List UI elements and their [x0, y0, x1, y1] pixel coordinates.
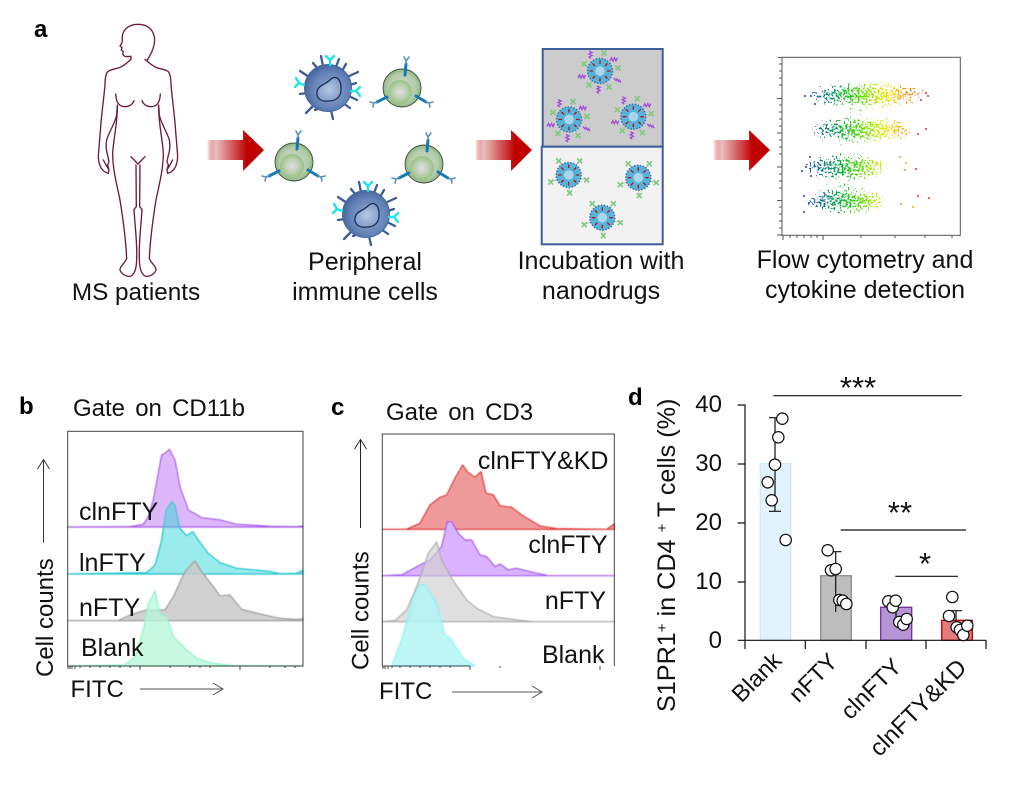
- label: MS patients: MS patients: [72, 279, 200, 306]
- chart: flow cytometry scatter: [777, 57, 960, 240]
- axes: [738, 405, 986, 649]
- error bars: [769, 418, 962, 625]
- data points: [762, 413, 973, 641]
- bars: [760, 464, 972, 640]
- panel b: histogram CD11b: [19, 393, 303, 703]
- label: peripheral immune cells: Peripheral: [308, 248, 422, 276]
- panel: nanodrug incubation bottom: [542, 147, 663, 244]
- frame and axes c: [382, 434, 614, 670]
- frame and axes b: [68, 431, 303, 670]
- panel c label: c: [331, 394, 344, 421]
- x tick labels: [727, 647, 972, 762]
- label: flow cytometry and cytokine detection: cytokine detection: [765, 276, 965, 304]
- labels c: clnFTY&KD: [478, 447, 608, 475]
- x arrow b: [140, 683, 223, 695]
- y tick labels: 40: [695, 391, 722, 418]
- icon: human body outline: [98, 24, 178, 276]
- labels c: nFTY: [545, 587, 606, 615]
- x axis label b: FITC: [70, 676, 124, 703]
- panel c title: Gate on CD3: [386, 399, 533, 426]
- y axis label c: Cell counts: [348, 551, 374, 670]
- x tick labels: Blank: [727, 647, 787, 707]
- y tick labels: 20: [695, 509, 722, 536]
- labels b: lnFTY: [79, 549, 146, 577]
- x tick labels: clnFTY: [836, 653, 907, 724]
- y axis title: T cells (%): [653, 399, 681, 524]
- y axis title: +: [654, 623, 671, 632]
- y axis title: S1PR1: [653, 632, 681, 712]
- arrow 2: [475, 130, 532, 171]
- labels b: [79, 498, 158, 662]
- y tick labels: 0: [709, 627, 722, 654]
- y tick labels: 30: [695, 450, 722, 477]
- panel b title: Gate on CD11b: [73, 395, 245, 422]
- x arrow c: [452, 686, 542, 698]
- y axis title: in CD4: [653, 532, 681, 623]
- labels c: clnFTY: [528, 531, 608, 559]
- label: incubation with nanodrugs: nanodrugs: [542, 277, 660, 305]
- labels b: clnFTY: [79, 498, 158, 526]
- x axis label c: FITC: [379, 678, 432, 705]
- significance *: *: [919, 546, 931, 581]
- y arrow b: [38, 460, 50, 543]
- histogram curves b: [68, 449, 303, 666]
- labels c: Blank: [542, 641, 605, 669]
- panel: nanodrug incubation top: [543, 49, 663, 147]
- panel a label: a: [34, 16, 48, 43]
- label: incubation with nanodrugs: Incubation with: [518, 247, 684, 275]
- histogram curves c: [382, 465, 614, 666]
- labels b: Blank: [81, 634, 144, 662]
- y axis title: +: [654, 523, 671, 532]
- arrow 1: [207, 130, 264, 171]
- x tick labels: nFTY: [784, 648, 843, 707]
- significance **: [841, 495, 966, 530]
- icon: peripheral immune cells: [262, 56, 455, 245]
- y tick labels: 10: [695, 568, 722, 595]
- significance *: [895, 546, 958, 581]
- panel c: histogram CD3: [331, 394, 614, 705]
- y axis label b: Cell counts: [32, 558, 59, 677]
- labels b: nFTY: [79, 594, 140, 622]
- label: flow cytometry and cytokine detection: Flow cytometry and: [757, 246, 973, 274]
- significance ***: ***: [840, 370, 876, 405]
- panel b label: b: [19, 393, 34, 420]
- label: peripheral immune cells: immune cells: [292, 278, 438, 306]
- labels c: [478, 447, 608, 669]
- panel d: bar chart: [628, 370, 986, 762]
- arrow 3: [713, 130, 770, 171]
- y tick labels: [695, 391, 722, 654]
- y arrow c: [354, 440, 366, 528]
- significance **: **: [888, 495, 912, 530]
- panel a: workflow: [72, 24, 973, 306]
- x tick labels: clnFTY&KD: [865, 654, 972, 762]
- panel d label: d: [628, 384, 643, 411]
